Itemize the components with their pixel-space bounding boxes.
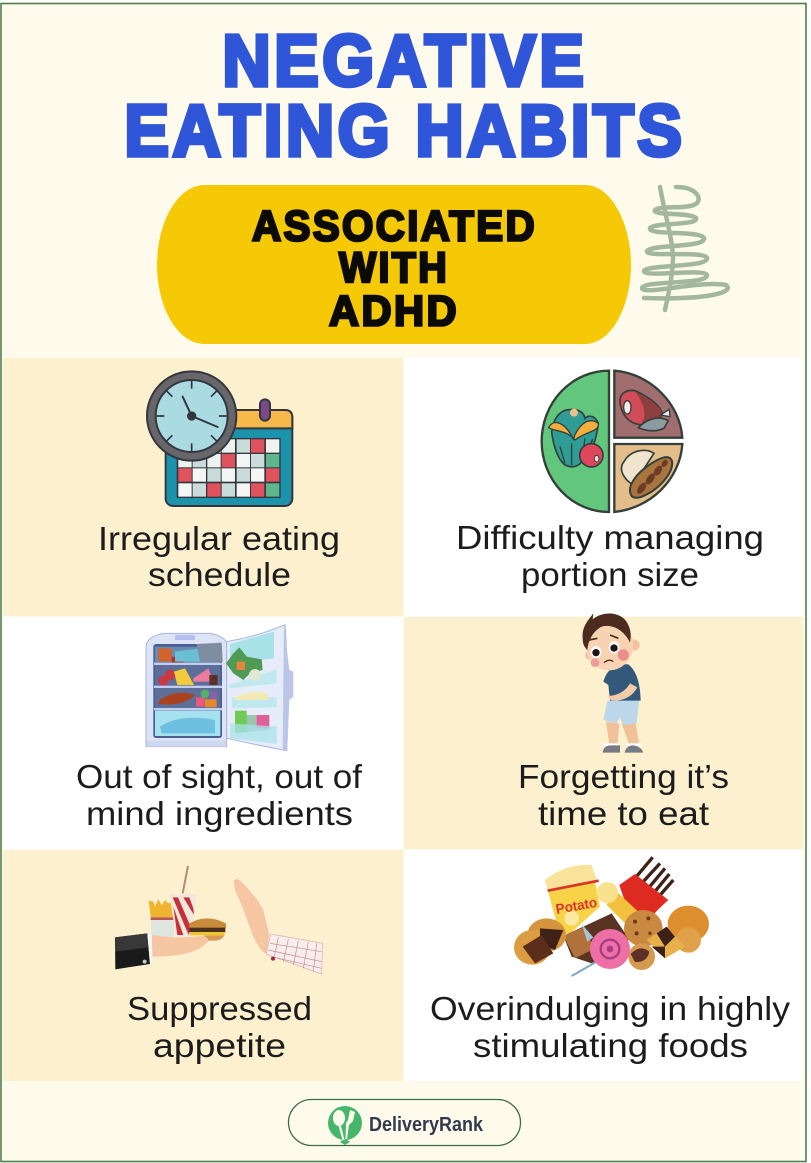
label: stimulating foods: [430, 990, 791, 1064]
label: out of sight: [76, 758, 363, 832]
label: portion size: portion size: [521, 556, 699, 593]
subtitle pill: [157, 185, 631, 344]
label: irregular eating schedule: schedule: [148, 556, 291, 593]
panel: forgetting to eat: [404, 613, 803, 849]
label: out of sight: mind ingredients: [86, 795, 353, 832]
subtitle pill: WITH: [339, 244, 449, 292]
icon: snack pile: [514, 857, 709, 976]
decorative spiral: [642, 187, 728, 310]
subtitle pill: ADHD: [329, 288, 459, 336]
title: EATING HABITS: [124, 92, 686, 172]
label: irregular eating schedule: [98, 520, 340, 593]
title: [124, 22, 686, 172]
subtitle pill: ASSOCIATED: [252, 202, 537, 250]
icon: clock and calendar: [147, 371, 292, 506]
icon: open fridge: [146, 625, 293, 751]
label: suppressed appetite: appetite: [153, 1027, 286, 1064]
logo badge: [288, 1100, 520, 1146]
panel: stimulating foods: [404, 850, 803, 1081]
panel: suppressed appetite: [3, 850, 403, 1081]
icon: boy holding stomach: [583, 613, 643, 753]
icon: hand refusing fast food: [115, 866, 323, 974]
label: suppressed appetite: Suppressed: [127, 990, 312, 1027]
icon: snack pile: Potato: [554, 894, 598, 917]
logo badge: DeliveryRank: [369, 1114, 484, 1136]
label: irregular eating schedule: Irregular eating: [98, 520, 340, 557]
label: stimulating foods: Overindulging in highly: [430, 990, 791, 1027]
label: forgetting to eat: time to eat: [538, 795, 709, 832]
icon: divided plate: [542, 371, 682, 512]
title: NEGATIVE: [222, 22, 588, 102]
panel: portion size: [404, 358, 803, 616]
label: forgetting to eat: [518, 758, 729, 832]
label: portion size: Difficulty managing: [456, 519, 764, 556]
label: suppressed appetite: [127, 990, 312, 1064]
panel: irregular eating schedule: [3, 358, 403, 616]
label: portion size: [456, 519, 764, 593]
label: stimulating foods: stimulating foods: [473, 1027, 748, 1064]
icon: fork and spoon logo: [328, 1106, 362, 1145]
label: out of sight: Out of sight, out of: [76, 758, 363, 795]
label: forgetting to eat: Forgetting it’s: [518, 758, 729, 795]
panel: out of sight: [3, 617, 403, 849]
